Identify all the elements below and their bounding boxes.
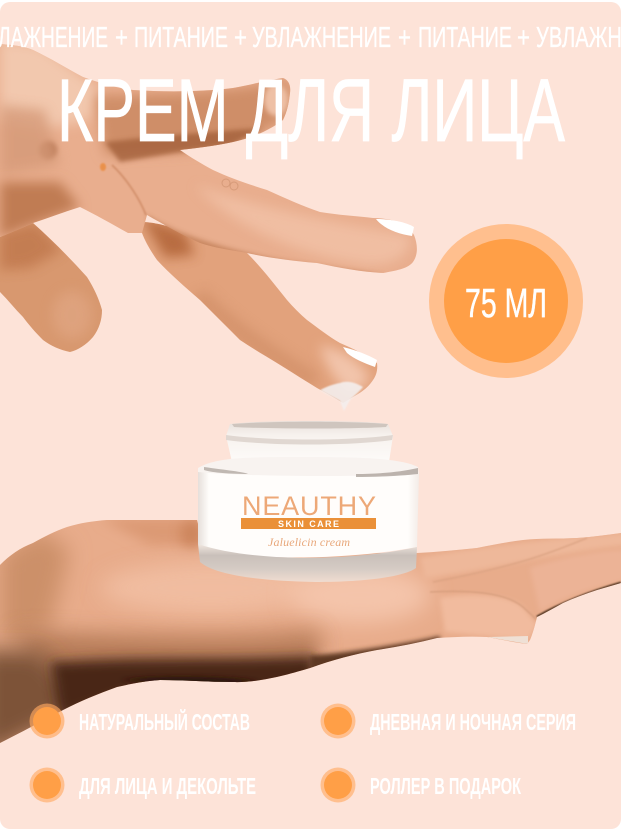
feature: face and neckline: [30, 768, 256, 802]
photo: lower hand: [0, 515, 621, 760]
palm, thumb and index finger: [0, 40, 420, 280]
marquee heading: ЛАЖНЕНИЕ: [0, 22, 108, 54]
skin care label: SKIN CARE: [278, 519, 339, 529]
photo: upper hand: [0, 40, 420, 411]
marquee heading: +: [398, 22, 411, 54]
marquee heading: +: [234, 22, 247, 54]
nail: index finger: [376, 219, 414, 236]
brand name: NEAUTHY: [242, 491, 376, 521]
feature: roller gift: [320, 768, 522, 802]
volume badge: [429, 224, 583, 378]
marquee heading: +: [517, 22, 530, 54]
little finger: [0, 222, 102, 352]
marquee heading: [0, 26, 620, 48]
feature: natural composition: [30, 704, 250, 738]
nail: middle finger: [343, 347, 377, 367]
marquee heading: УВЛАЖНЕНИЕ: [252, 22, 391, 54]
marquee heading: +: [115, 22, 128, 54]
marquee heading: ПИТАНИЕ: [418, 22, 512, 54]
feature: natural composition: НАТУРАЛЬНЫЙ СОСТАВ: [79, 708, 250, 735]
jar shoulder: [198, 459, 419, 476]
brand bar: [241, 518, 376, 529]
feature: face and neckline: ДЛЯ ЛИЦА И ДЕКОЛЬТЕ: [79, 773, 256, 799]
marquee heading: ПИТАНИЕ: [134, 22, 228, 54]
feature: roller gift: РОЛЛЕР В ПОДАРОК: [370, 773, 522, 799]
cream on fingertip: [320, 382, 363, 411]
jar neck: [226, 421, 393, 462]
glass base: [198, 544, 417, 582]
volume badge: 75 МЛ: [465, 280, 547, 326]
product name: Jaluelicin cream: [268, 535, 350, 549]
middle finger: [142, 222, 378, 402]
feature: day and night series: [320, 704, 576, 738]
jar body: [198, 472, 419, 558]
jar: [198, 421, 419, 582]
